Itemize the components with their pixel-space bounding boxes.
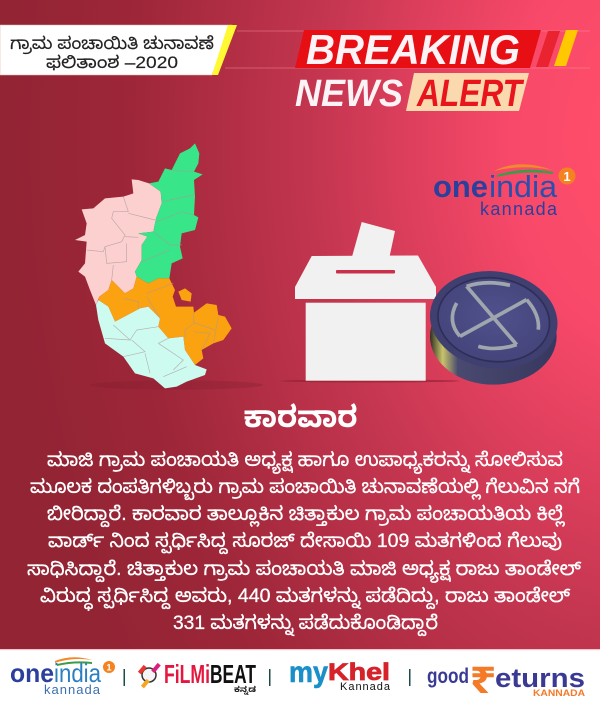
icon: swastika election symbol coin [424,263,564,385]
body text: 331 ಮತಗಳನ್ನು ಪಡೆದುಕೊಂಡಿದ್ದಾರೆ [173,613,438,636]
footer logo: oneindia: 1 [106,662,112,672]
footer logo: oneindia [10,657,115,697]
header label: election results [0,25,237,75]
icon: ballot box [280,222,460,382]
heading: Karwar: ಕಾರವಾರ [244,401,358,434]
body text: ಬೀರಿದ್ದಾರೆ. ಕಾರವಾರ ತಾಲ್ಲೂಕಿನ ಚಿತ್ತಾಕುಲ ಗ್ರಾಮ ಪಂಚಾಯತಿಯ ಕಿಲ್ಲೆ [47,504,566,527]
footer logo: oneindia: one [10,658,54,688]
map region: central orange [98,277,232,365]
footer strip [0,649,600,706]
box body [306,303,426,381]
body text: ಸಾಧಿಸಿದ್ದಾರೆ. ಚಿತ್ತಾಕುಲ ಗ್ರಾಮ ಪಂಚಾಯತಿ ಮಾಜಿ ಅಧ್ಯಕ್ಷ ರಾಜು ತಾಂಡೇಲ್ [27,559,581,583]
footer logo: mykhel: Khel [328,659,390,686]
ballot slot [336,270,395,274]
footer logo: oneindia: india [54,658,101,688]
header label: election results: ಫಲಿತಾಂಶ –2020 [46,53,178,72]
logo: oneindia kannada: kannada [480,199,558,219]
footer logo: mykhel: my [289,656,328,689]
body text: ವಿರುದ್ಧ ಸ್ಪರ್ಧಿಸಿದ್ದ ಅವರು, 440 ಮತಗಳನ್ನು ಪಡೆದಿದ್ದು, ರಾಜು ತಾಂಡೇಲ್ [40,586,570,611]
map shadow [90,380,263,390]
footer logo: goodreturns: good [427,665,469,688]
breaking news alert banner [225,26,590,115]
footer logo: oneindia: kannada [44,682,101,697]
body text [27,450,581,636]
map region: north-west pink [75,179,162,305]
body text: ವಾರ್ಡ್ ನಿಂದ ಸ್ಪರ್ಧಿಸಿದ್ದ ಸೂರಜ್ ದೇಸಾಯಿ 109 ಮತಗಳಿಂದ ಗೆಲುವು [48,531,562,554]
footer logo: filmibeat [138,659,256,696]
footer logo: filmibeat: FiLMi [164,659,210,689]
header label: election results: ಗ್ರಾಮ ಪಂಚಾಯಿತಿ ಚುನಾವಣೆ [10,34,214,55]
logo: oneindia kannada [433,164,576,219]
map of Karnataka [75,143,263,390]
footer logo: mykhel [289,656,391,693]
body text: ಮಾಜಿ ಗ್ರಾಮ ಪಂಚಾಯತಿ ಅಧ್ಯಕ್ಷ ಹಾಗೂ ಉಪಾಧ್ಯಕರನ್ನು ಸೋಲಿಸುವ [47,450,563,474]
map region: north-east green [135,143,203,283]
ballot paper [348,222,395,270]
box lid [295,256,436,299]
separator [124,669,125,686]
breaking news alert banner: NEWS [295,73,403,115]
breaking news alert banner: ALERT [416,73,524,115]
map region: south mint [96,300,207,388]
footer logo: filmibeat: BEAT [210,659,256,689]
logo: oneindia kannada: 1 [563,169,571,184]
footer logo: goodreturns: eturns [495,663,585,693]
footer logo: goodreturns: KANNADA [533,688,585,699]
footer logo: mykhel: Kannada [340,681,391,693]
separator [409,669,410,686]
footer logo: goodreturns [427,660,585,702]
body text: ಮೂಲಕ ದಂಪತಿಗಳಿಬ್ಬರು ಗ್ರಾಮ ಪಂಚಾಯಿತಿ ಚುನಾವಣೆಯಲ್ಲಿ ಗೆಲುವಿನ ನಗೆ [30,477,580,500]
footer logo: filmibeat: ಕನ್ನಡ [234,685,256,696]
breaking news alert banner: BREAKING [306,26,520,73]
separator [269,669,270,686]
logo: oneindia kannada: one [433,169,488,204]
district borders [87,171,218,377]
logo: oneindia kannada: india [489,169,558,204]
footer logo: goodreturns: ₹ [470,660,496,702]
